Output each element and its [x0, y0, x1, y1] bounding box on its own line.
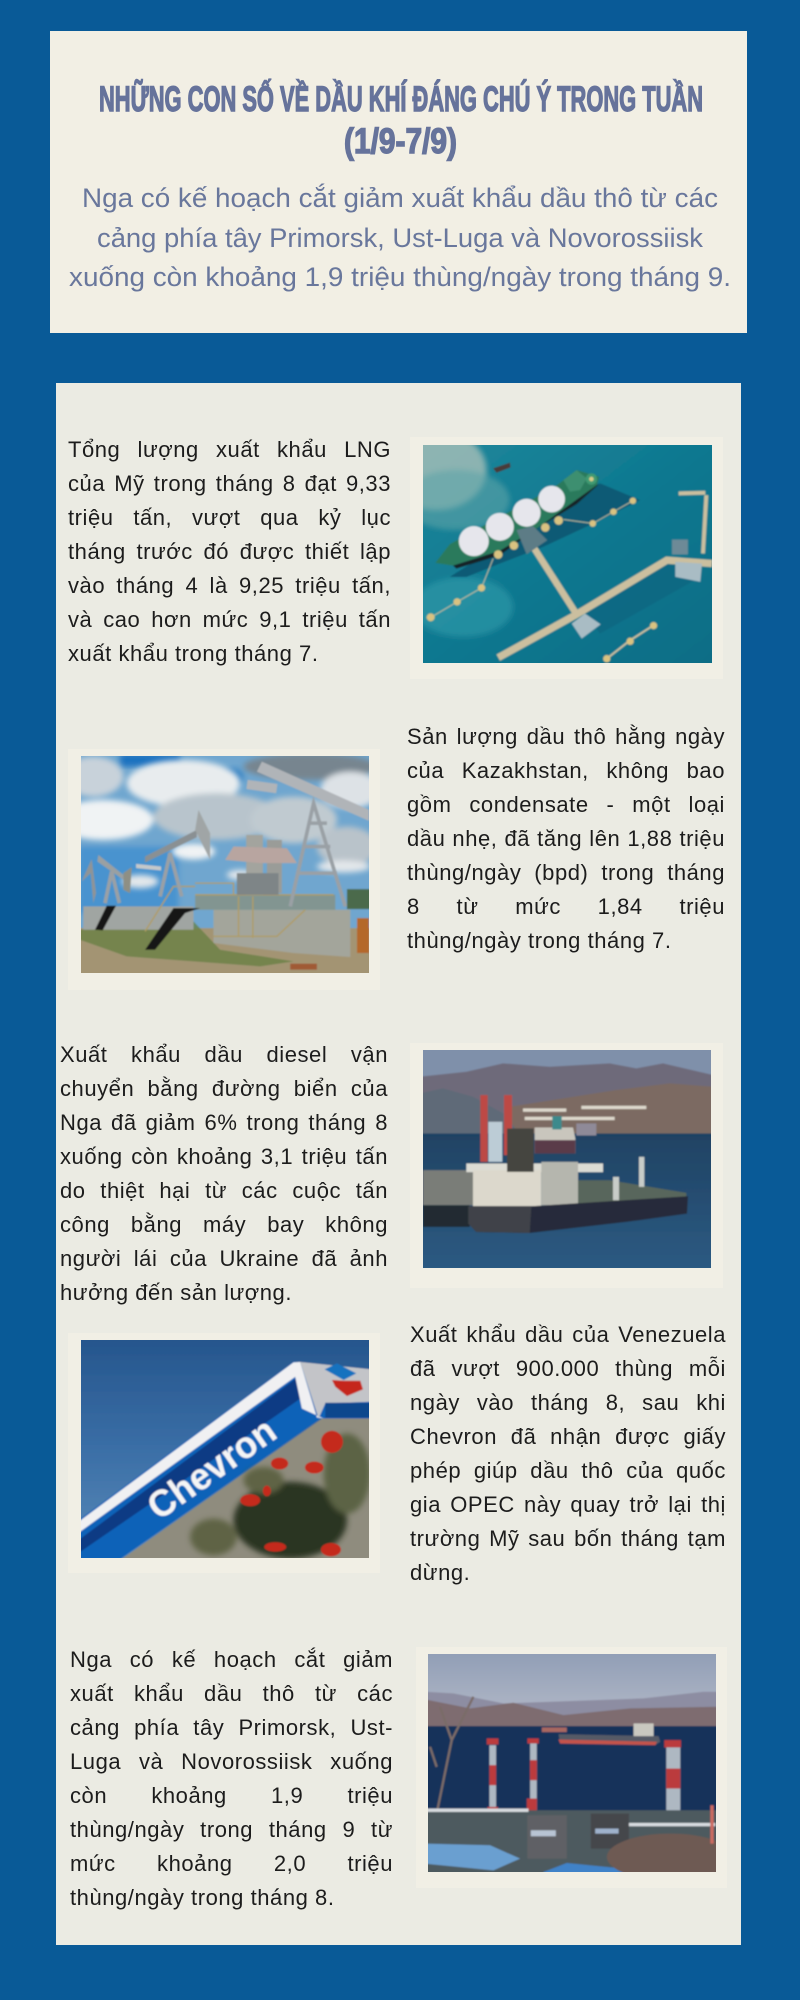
text block: Russian diesel exports: công bằng máy bay không	[60, 1212, 388, 1237]
text block: Venezuela exports: đã vượt 900.000 thùng mỗi	[410, 1356, 726, 1381]
text block: US LNG exports: triệu tấn, vượt qua kỷ lục	[68, 505, 391, 530]
text block: Kazakhstan output: thùng/ngày (bpd) trong tháng	[407, 860, 725, 885]
port and towers scene	[428, 1654, 716, 1872]
text block: Venezuela exports: Xuất khẩu dầu của Venezuela	[410, 1322, 726, 1347]
text block: Kazakhstan output: của Kazakhstan, không bao	[407, 758, 725, 783]
intro paragraph: xuống còn khoảng 1,9 triệu thùng/ngày trong tháng 9.	[69, 262, 731, 292]
content panel	[56, 383, 741, 1945]
intro paragraph: Nga có kế hoạch cắt giảm xuất khẩu dầu thô từ các	[82, 182, 718, 213]
text block: Russian diesel exports: hưởng đến sản lượng.	[60, 1280, 292, 1305]
tanker scene	[423, 1050, 711, 1268]
Chevron canopy scene	[81, 1340, 369, 1558]
text block: Russian crude exports: thùng/ngày trong tháng 8.	[70, 1885, 335, 1910]
text block: US LNG exports: của Mỹ trong tháng 8 đạt 9,33	[68, 471, 391, 496]
aerial LNG scene	[423, 445, 712, 663]
title: (1/9-7/9)	[344, 122, 457, 161]
text block: US LNG exports: tháng trước đó được thiết lập	[68, 539, 391, 564]
text block: Venezuela exports: Chevron đã nhận được giấy	[410, 1424, 726, 1449]
text block: Russian crude exports: cảng phía tây Primorsk, Ust-	[70, 1715, 393, 1740]
text block: Kazakhstan output: Sản lượng dầu thô hằng ngày	[407, 724, 725, 749]
text block: Venezuela exports: ngày vào tháng 8, sau khi	[410, 1390, 726, 1415]
title and intro text	[69, 78, 731, 292]
photo: oil tanker at port	[410, 1043, 723, 1288]
text block: Kazakhstan output: gồm condensate - một loại	[407, 792, 725, 817]
intro paragraph: cảng phía tây Primorsk, Ust-Luga và Novorossiisk	[97, 223, 704, 253]
text block: Russian diesel exports: Xuất khẩu dầu diesel vận	[60, 1042, 388, 1067]
text block: Russian crude exports: thùng/ngày trong tháng 9 từ	[70, 1817, 393, 1842]
photo: Chevron station sign	[68, 1333, 380, 1573]
text block: Russian diesel exports: người lái của Ukraine đã ảnh	[60, 1246, 388, 1271]
pumpjack field scene	[81, 756, 369, 973]
text block: US LNG exports: và cao hơn mức 9,1 triệu tấn	[68, 607, 391, 632]
text block: Russian diesel exports: chuyển bằng đường biển của	[60, 1076, 388, 1101]
text block: US LNG exports: Tổng lượng xuất khẩu LNG	[68, 437, 391, 462]
text block: Venezuela exports: trường Mỹ sau bốn tháng tạm	[410, 1526, 726, 1551]
text block: Russian crude exports	[70, 1647, 393, 1910]
photo: oil pumpjacks	[68, 749, 380, 990]
text block: Venezuela exports: gia OPEC này quay trở lại thị	[410, 1492, 726, 1517]
title	[99, 79, 703, 161]
text block: Venezuela exports: phép giúp dầu thô của quốc	[410, 1458, 726, 1483]
text block: US LNG exports: xuất khẩu trong tháng 7.	[68, 641, 318, 666]
text block: Venezuela exports: dừng.	[410, 1560, 470, 1585]
text block: Venezuela exports	[410, 1322, 726, 1585]
photo: LNG tanker at terminal	[410, 437, 723, 679]
text block: Russian crude exports: Luga và Novorossiisk xuống	[70, 1749, 393, 1774]
photo: Russian oil port	[416, 1647, 727, 1888]
header panel	[50, 31, 747, 333]
text block: US LNG exports	[68, 437, 391, 666]
text block: Kazakhstan output: 8 từ mức 1,84 triệu	[407, 894, 725, 919]
text block: Kazakhstan output	[407, 724, 725, 953]
intro paragraph	[69, 182, 731, 292]
text block: Russian crude exports: còn khoảng 1,9 triệu	[70, 1783, 393, 1808]
text block: Russian crude exports: xuất khẩu dầu thô từ các	[70, 1681, 393, 1706]
text block: US LNG exports: vào tháng 4 là 9,25 triệu tấn,	[68, 573, 391, 598]
text block: Russian crude exports: mức khoảng 2,0 triệu	[70, 1851, 393, 1876]
text block: Kazakhstan output: dầu nhẹ, đã tăng lên 1,88 triệu	[407, 826, 725, 851]
text block: Kazakhstan output: thùng/ngày trong tháng 7.	[407, 928, 672, 953]
text block: Russian diesel exports: xuống còn khoảng 3,1 triệu tấn	[60, 1144, 388, 1169]
text block: Russian crude exports: Nga có kế hoạch cắt giảm	[70, 1647, 393, 1672]
text block: Russian diesel exports: Nga đã giảm 6% trong tháng 8	[60, 1110, 388, 1135]
text block: Russian diesel exports: do thiệt hại từ các cuộc tấn	[60, 1178, 388, 1203]
Chevron lettering: Chevron	[139, 1409, 284, 1527]
text block: Russian diesel exports	[60, 1042, 388, 1305]
